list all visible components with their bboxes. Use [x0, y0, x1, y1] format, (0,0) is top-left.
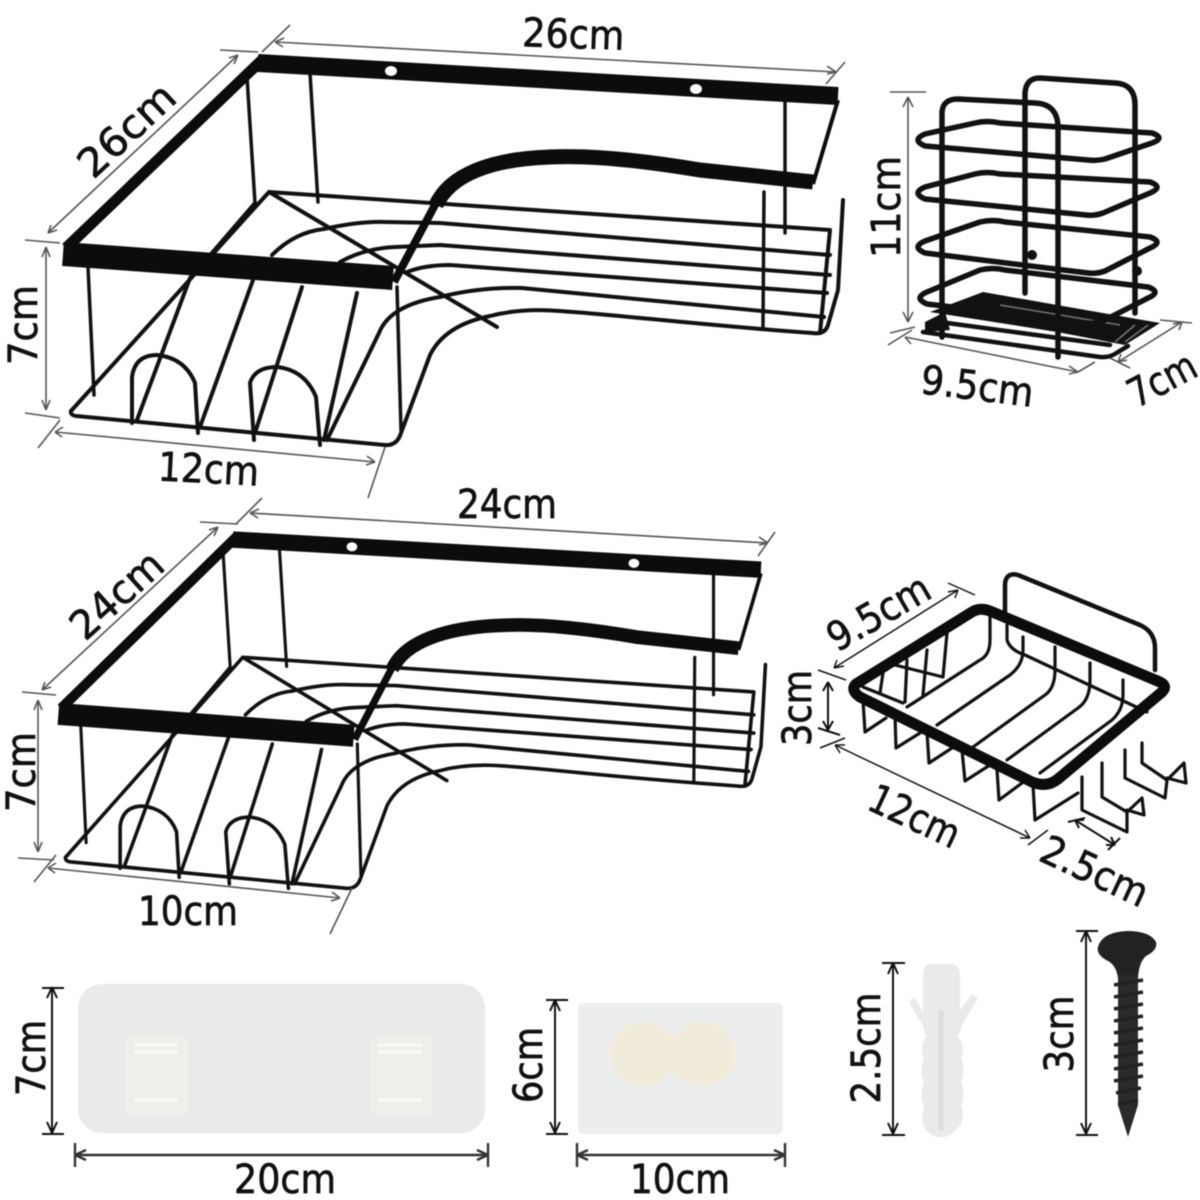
- panel: large adhesive pad: [78, 984, 485, 1133]
- large pad body: [78, 984, 485, 1133]
- labels: caddy: 9.5cm: [918, 357, 1036, 417]
- labels: small shelf: [0, 482, 557, 935]
- large pad clips: [126, 1038, 432, 1114]
- labels: accessories: 7cm: [9, 1020, 55, 1096]
- icon: screw: [1098, 931, 1156, 1137]
- labels: accessories: 6cm: [506, 1027, 552, 1103]
- small pad body: [578, 1003, 783, 1134]
- labels: soap dish: 2.5cm: [1033, 827, 1156, 917]
- soap dish back plate: [1005, 574, 1155, 670]
- labels: accessories: 3cm: [1037, 996, 1083, 1072]
- labels: soap dish: 9.5cm: [819, 565, 939, 661]
- dimension lines: accessories: [42, 931, 1098, 1167]
- panel: large corner shelf: [63, 60, 843, 445]
- dimension lines: soap dish: [818, 583, 1120, 850]
- labels: small shelf: 24cm: [457, 482, 557, 528]
- shelf uprights: [88, 73, 785, 430]
- labels: small shelf: 24cm: [61, 542, 174, 649]
- labels: caddy: [864, 156, 1200, 417]
- labels: small shelf: 7cm: [0, 732, 45, 812]
- labels: soap dish: 3cm: [775, 670, 821, 746]
- caddy knobs: [1027, 250, 1142, 276]
- dimension lines: caddy: [888, 92, 1192, 374]
- labels: large shelf: [1, 10, 625, 496]
- panel: soap dish: [854, 574, 1186, 832]
- large pad clip ridges: [134, 1045, 422, 1100]
- labels: large shelf: 26cm: [69, 74, 186, 187]
- labels: soap dish: 12cm: [861, 776, 967, 858]
- screw thread: [1114, 980, 1143, 1105]
- dimension lines: large shelf: [25, 25, 845, 498]
- labels: accessories: 2.5cm: [844, 992, 890, 1104]
- small shelf screw holes: [347, 542, 639, 568]
- small shelf uprights: [81, 549, 714, 875]
- small shelf wire basket: [65, 657, 765, 888]
- labels: large shelf: 12cm: [157, 444, 260, 496]
- shelf screw holes: [385, 66, 702, 94]
- soap dish rim: [854, 609, 1165, 784]
- panel: utensil caddy: [918, 78, 1160, 357]
- labels: caddy: 11cm: [864, 156, 910, 258]
- shelf top rim: [63, 60, 838, 282]
- labels: soap dish: [775, 565, 1156, 917]
- labels: large shelf: 26cm: [522, 10, 625, 60]
- caddy wire rings: [918, 122, 1159, 323]
- soap dish floor wires: [863, 617, 1147, 773]
- caddy uprights: [942, 78, 1135, 357]
- soap dish front teeth: [863, 700, 1078, 820]
- labels: accessories: [9, 992, 1083, 1200]
- labels: small shelf: 10cm: [138, 889, 238, 935]
- dimension lines: small shelf: [18, 498, 775, 934]
- caddy base tray: [923, 292, 1160, 357]
- small pad adhesive dots: [610, 1022, 735, 1086]
- soap dish hooks: [1082, 743, 1186, 832]
- panel: small adhesive pad: [578, 1003, 783, 1134]
- panel: small corner shelf: [58, 537, 765, 888]
- icon: wall anchor: [909, 964, 978, 1137]
- screw shaft: [1118, 975, 1138, 1137]
- labels: large shelf: 7cm: [1, 285, 47, 365]
- screw head: [1098, 931, 1156, 978]
- small shelf top rim: [58, 537, 761, 739]
- shelf wire basket: [71, 192, 843, 445]
